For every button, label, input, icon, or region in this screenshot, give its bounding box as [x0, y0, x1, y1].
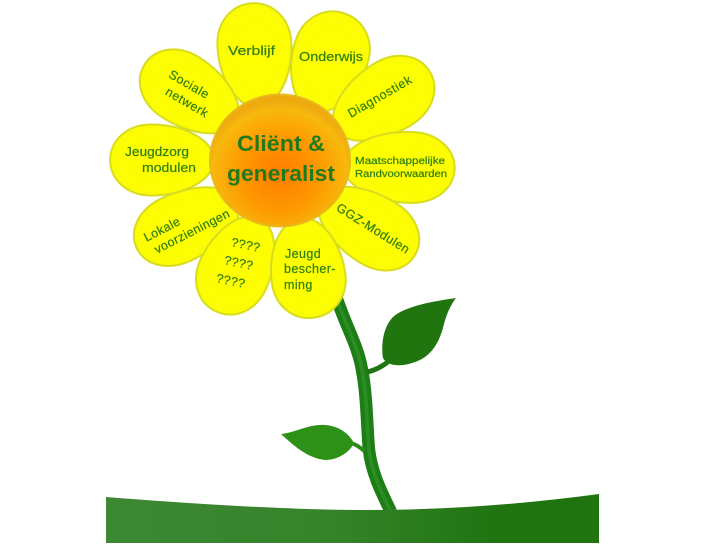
label: question marks: ???? — [215, 271, 247, 291]
label: Sociale netwerk: netwerk — [163, 85, 211, 121]
petal: Diagnostiek — [315, 41, 449, 161]
label: Sociale netwerk: Sociale — [166, 67, 212, 102]
center disc — [210, 94, 350, 226]
label: Jeugd bescherming — [284, 247, 336, 292]
petal: Lokale voorzieningen — [122, 169, 254, 279]
label: Diagnostiek: Diagnostiek — [345, 72, 415, 121]
petal: GGZ-Modulen — [301, 167, 433, 285]
label: question marks: ???? — [223, 253, 255, 273]
center title: generalist — [227, 161, 336, 186]
petal: Sociale netwerk — [126, 35, 256, 153]
petal: Maatschappelijke — [340, 130, 456, 204]
label: Sociale netwerk — [163, 67, 212, 121]
ground — [106, 494, 599, 543]
label: Maatschappelijke Randvoorwaarden: Randvoorwaarden — [355, 169, 447, 180]
label: Jeugd bescherming: ming — [284, 278, 313, 292]
label: Lokale voorzieningen: Lokale — [142, 214, 183, 245]
label: Jeugd bescherming: Jeugd — [285, 247, 321, 261]
petal: question marks — [183, 201, 293, 327]
petals — [110, 1, 456, 327]
petal: Jeugdzorg modulen — [110, 124, 216, 196]
lower leaf — [281, 425, 364, 460]
petal: Verblijf — [215, 1, 295, 111]
label: Onderwijs: Onderwijs — [299, 50, 363, 64]
center title: Cliënt & — [237, 131, 325, 156]
label: Maatschappelijke Randvoorwaarden: Maatschappelijke — [355, 156, 446, 167]
stem — [336, 296, 391, 512]
label: Lokale voorzieningen: voorzieningen — [152, 206, 232, 257]
label: Jeugdzorg modulen: Jeugdzorg — [125, 145, 189, 159]
label: question marks — [215, 235, 262, 291]
petal: Jeugd bescherming — [263, 211, 351, 323]
label: Maatschappelijke Randvoorwaarden — [355, 156, 447, 180]
upper leaf — [367, 298, 456, 372]
label: Jeugdzorg modulen: modulen — [142, 161, 196, 175]
center title — [227, 131, 336, 186]
label: GGZ-Modulen: GGZ-Modulen — [334, 201, 412, 257]
label: question marks: ???? — [230, 235, 262, 255]
label: Jeugdzorg modulen — [125, 145, 196, 175]
label: Jeugd bescherming: bescher- — [284, 262, 336, 276]
petal: Onderwijs — [276, 2, 380, 124]
label: Verblijf: Verblijf — [228, 44, 276, 58]
